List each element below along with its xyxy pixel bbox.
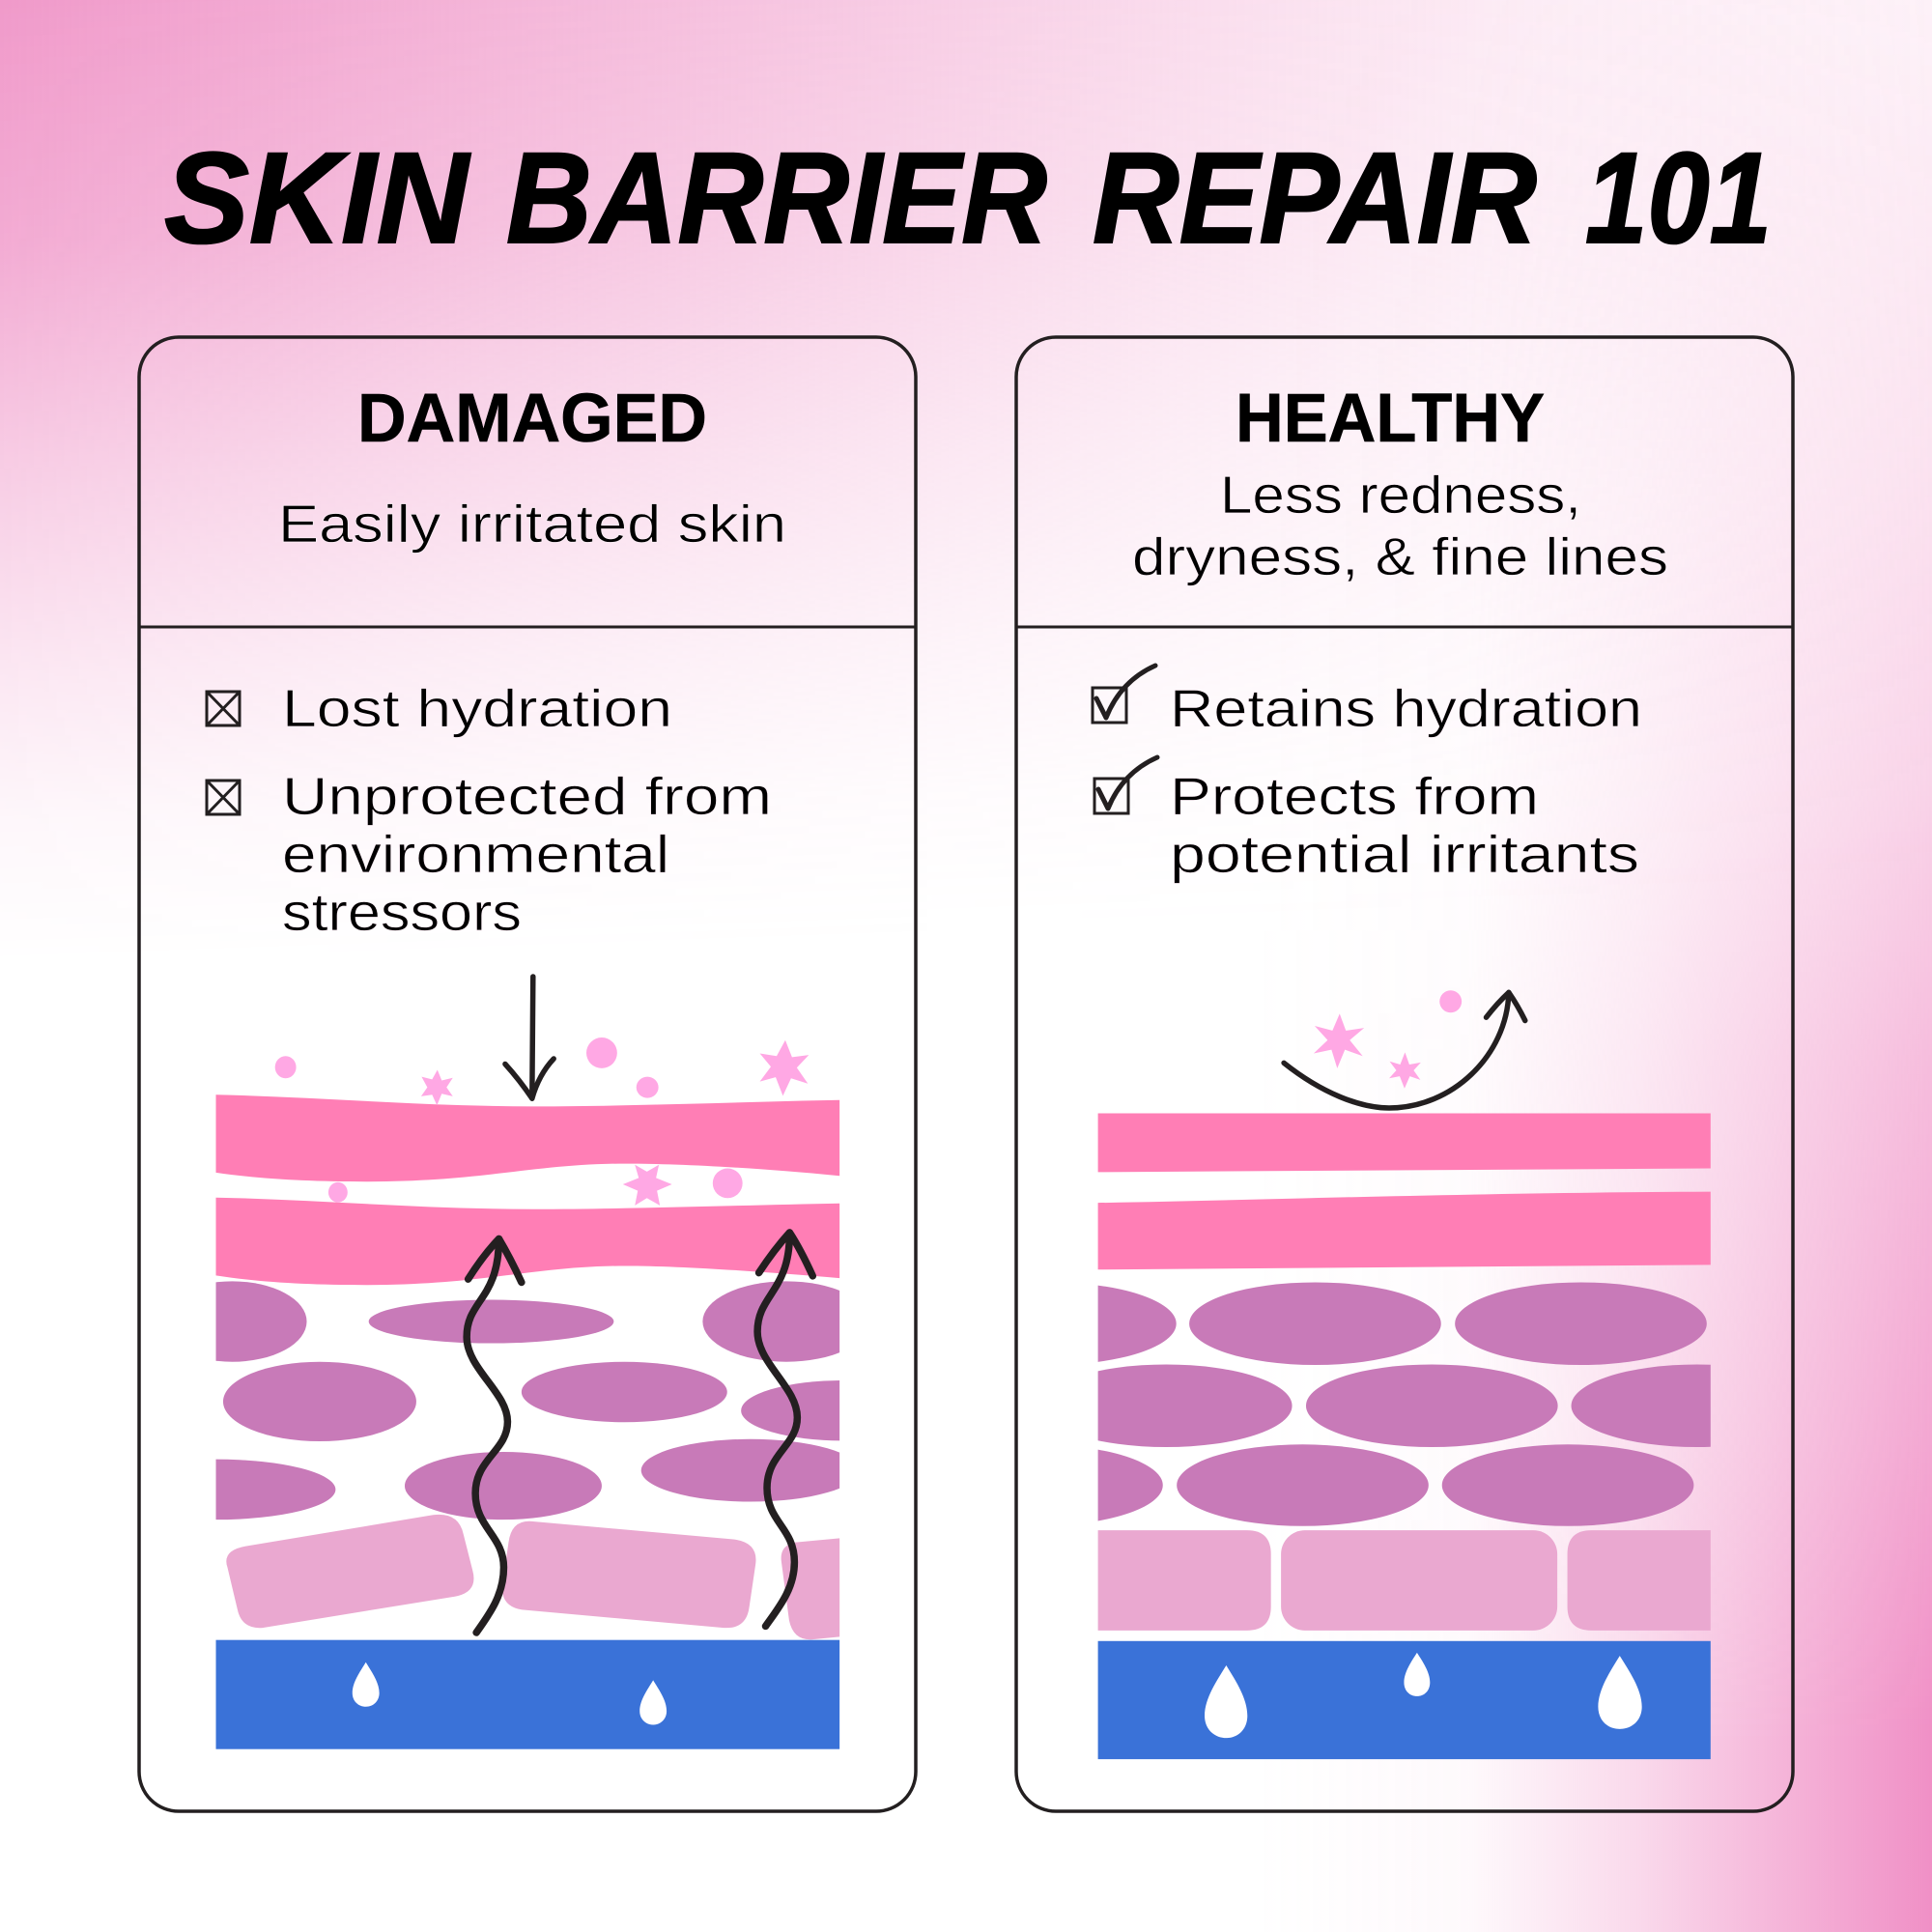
damaged lower bricks (226, 1515, 839, 1639)
list item: unprotected (282, 766, 772, 942)
list item: lost hydration: Lost hydration (282, 678, 672, 738)
panel: damaged (97, 337, 947, 1811)
healthy cells (1097, 1283, 1711, 1526)
heading: damaged: DAMAGED (357, 381, 707, 457)
list item: protects (1170, 766, 1639, 884)
panel: healthy (1014, 335, 1795, 1813)
icon: x box 1 (207, 692, 240, 725)
list item: retains hydration: Retains hydration (1170, 678, 1642, 738)
list item: protects: potential irritants (1170, 824, 1639, 884)
title: SKIN (164, 127, 471, 270)
subtitle: healthy: Less redness, (1220, 465, 1581, 525)
diagram: damaged skin layers (216, 974, 840, 1749)
panel frame: damaged (139, 337, 916, 1811)
irritant particles (275, 1037, 809, 1206)
arrow: irritants entering (505, 977, 554, 1098)
subtitle: healthy (1132, 465, 1668, 586)
panel frame: healthy (1016, 337, 1793, 1811)
healthy water layer (1098, 1641, 1711, 1759)
heading: healthy: HEALTHY (1236, 381, 1545, 457)
diagram: healthy skin layers (1097, 989, 1711, 1760)
list item: unprotected: stressors (282, 882, 522, 942)
arrow: irritants deflected (1284, 992, 1525, 1108)
title: REPAIR (1093, 127, 1537, 270)
water drops (1205, 1653, 1642, 1738)
healthy top layers (1098, 1113, 1711, 1269)
damaged water layer (216, 1640, 839, 1749)
list item: unprotected: Unprotected from (282, 766, 772, 826)
title: 101 (1585, 127, 1772, 270)
list item: unprotected: environmental (282, 824, 669, 884)
icon: check box 1 (1093, 666, 1155, 723)
damaged top layers (216, 1094, 839, 1285)
subtitle: damaged: Easily irritated skin (278, 494, 786, 554)
list item: protects: Protects from (1170, 766, 1539, 826)
healthy lower bricks (1098, 1530, 1711, 1631)
arrow: water escaping 2 (757, 1233, 812, 1626)
icon: check box 2 (1094, 757, 1157, 813)
subtitle: healthy: dryness, & fine lines (1132, 526, 1668, 586)
divider: healthy (1015, 626, 1793, 628)
damaged cells (216, 1281, 840, 1520)
title (164, 127, 1772, 270)
icon: x box 2 (207, 781, 240, 814)
divider: damaged (138, 626, 916, 628)
water drops (353, 1662, 667, 1724)
arrow: water escaping 1 (467, 1238, 522, 1633)
title: BARRIER (506, 127, 1047, 270)
deflected particles (1314, 990, 1462, 1089)
